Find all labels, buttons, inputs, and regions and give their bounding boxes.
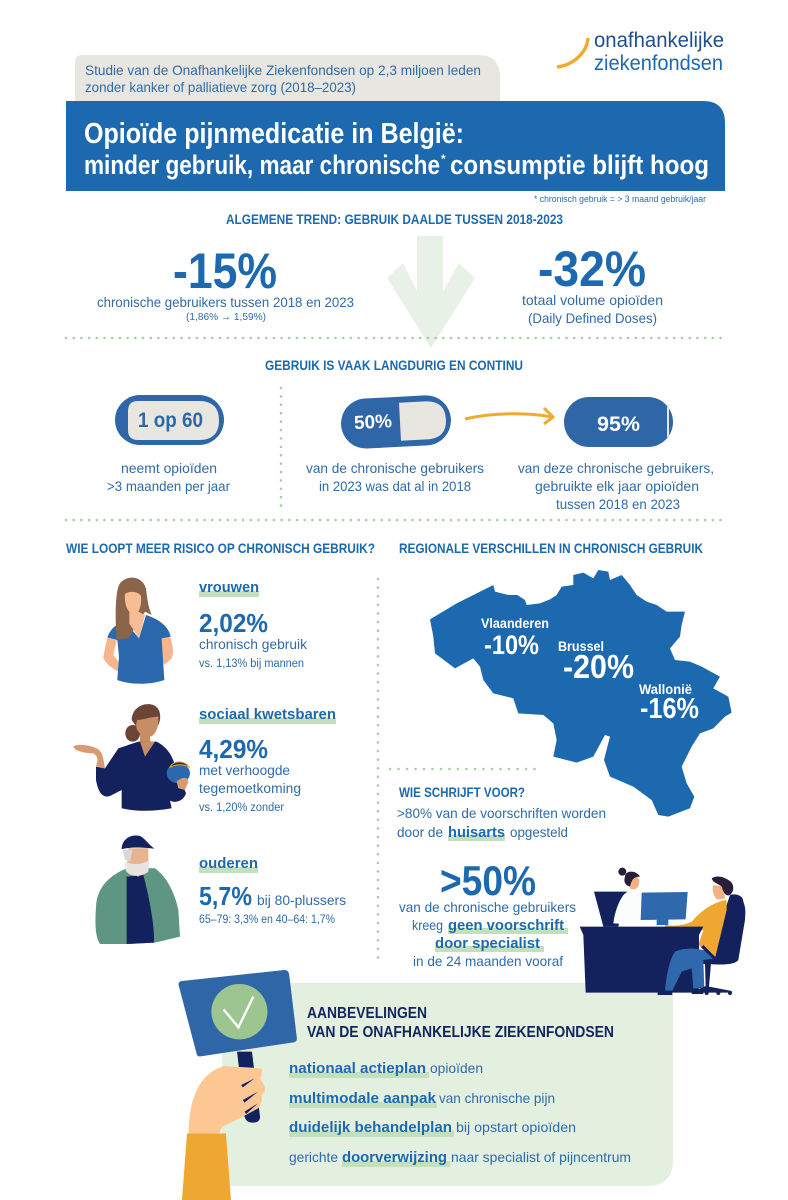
panel: recommendations: VAN DE ONAFHANKELIJKE ZIEKENFONDSEN (307, 1024, 614, 1041)
stat: over 50 percent: geen voorschrift (448, 917, 564, 934)
group: women: chronisch gebruik (199, 636, 308, 652)
group: socially vulnerable: tegemoetkoming (199, 780, 301, 796)
panel: recommendations: nationaal actieplan (289, 1060, 426, 1077)
group: women: 2,02% (199, 608, 268, 638)
icon: woman (103, 578, 173, 684)
map: Belgium: Brussel (558, 639, 604, 654)
heading: general trend: ALGEMENE TREND: GEBRUIK DAALDE TUSSEN 2018-2023 (226, 211, 563, 227)
stat: minus 15 percent (97, 243, 354, 323)
stat: over 50 percent: >50% (440, 857, 536, 904)
text: 50 percent: van de chronische gebruikers (306, 460, 484, 476)
group: women: vs. 1,13% bij mannen (199, 658, 304, 670)
heading: risk groups: WIE LOOPT MEER RISICO OP CHRONISCH GEBRUIK? (66, 540, 375, 556)
map: Belgium: -10% (484, 630, 539, 660)
arrow: pill to pill (465, 408, 553, 424)
study note tab: zonder kanker of palliatieve zorg (2018–2023) (85, 79, 356, 95)
panel: recommendations: naar specialist of pijncentrum (451, 1149, 631, 1165)
pill: 1 op 60: 1 op 60 (138, 409, 203, 432)
icon: doctor at desk with patient (580, 868, 745, 995)
panel: recommendations: van chronische pijn (439, 1090, 555, 1106)
panel: recommendations: gerichte (289, 1149, 338, 1165)
logo: onafhankelijke (594, 29, 724, 52)
text: 95 percent: tussen 2018 en 2023 (556, 496, 680, 512)
panel: recommendations: multimodale aanpak (289, 1090, 437, 1107)
text: 50 percent: in 2023 was dat al in 2018 (319, 478, 471, 494)
stat: minus 32 percent: totaal volume opioïden (522, 292, 663, 308)
logo: ziekenfondsen (594, 52, 723, 75)
pill: 95 percent (564, 397, 673, 447)
heading: regional differences: REGIONALE VERSCHILLEN IN CHRONISCH GEBRUIK (399, 540, 703, 556)
map: Belgium: Vlaanderen (481, 616, 549, 631)
stat: minus 15 percent: -15% (173, 243, 277, 299)
text: 1 in 60: neemt opioïden (121, 460, 217, 476)
stat: over 50 percent: in de 24 maanden vooraf (413, 953, 563, 969)
map: Belgium: -16% (640, 693, 699, 725)
stat: over 50 percent: van de chronische gebruikers (399, 899, 576, 915)
stat: over 50 percent (399, 857, 576, 969)
study note tab: Studie van de Onafhankelijke Ziekenfondsen op 2,3 miljoen leden (85, 62, 481, 78)
group: socially vulnerable (199, 706, 336, 814)
text: who prescribes: door de (397, 824, 443, 840)
logo (557, 29, 724, 75)
arrow: downward trend (387, 236, 475, 348)
text: 1 in 60: >3 maanden per jaar (107, 478, 230, 494)
text: who prescribes (397, 784, 606, 841)
group: elderly (199, 855, 346, 926)
stat: minus 15 percent: (1,86% → 1,59%) (186, 311, 266, 323)
study note tab (75, 55, 500, 101)
title banner: consumptie blijft hoog (450, 150, 709, 180)
stat: minus 32 percent: (Daily Defined Doses) (528, 310, 657, 326)
pill: 1 op 60 (115, 395, 224, 445)
stat: over 50 percent: door specialist (435, 935, 540, 952)
title banner (66, 101, 725, 191)
text: 50 percent (306, 460, 484, 494)
heading: long-term use: GEBRUIK IS VAAK LANGDURIG EN CONTINU (265, 357, 523, 373)
panel: recommendations: duidelijk behandelplan (289, 1119, 452, 1136)
stat: over 50 percent: kreeg (412, 917, 443, 933)
title banner: * (441, 152, 446, 166)
group: socially vulnerable: sociaal kwetsbaren (199, 706, 336, 723)
group: women (199, 579, 308, 670)
text: 95 percent (518, 460, 714, 512)
panel: recommendations: doorverwijzing (342, 1149, 447, 1166)
group: women: vrouwen (199, 579, 259, 596)
group: elderly: 65–79: 3,3% en 40–64: 1,7% (199, 914, 335, 926)
map: Belgium: -20% (563, 648, 634, 685)
stat: minus 32 percent: -32% (538, 241, 646, 297)
text: who prescribes: WIE SCHRIJFT VOOR? (399, 784, 525, 800)
stat: minus 32 percent (522, 241, 663, 326)
map: Belgium (430, 570, 732, 817)
group: elderly: bij 80-plussers (257, 892, 346, 908)
group: socially vulnerable: vs. 1,20% zonder (199, 802, 284, 814)
map: Belgium: Wallonië (639, 682, 692, 697)
text: who prescribes: huisarts (448, 824, 505, 841)
group: elderly: 5,7% (199, 881, 252, 911)
icon: woman with purse (73, 704, 190, 811)
title banner: Opioïde pijnmedicatie in België: (84, 118, 464, 150)
pill: 50 percent (340, 394, 452, 450)
group: elderly: ouderen (199, 855, 258, 872)
panel: recommendations: AANBEVELINGEN (307, 1005, 427, 1022)
text: who prescribes: opgesteld (510, 824, 568, 840)
panel: recommendations: opioïden (430, 1060, 483, 1076)
title banner: minder gebruik, maar chronische (84, 150, 440, 180)
text: 95 percent: van deze chronische gebruikers, (518, 460, 714, 476)
panel: recommendations (222, 983, 673, 1186)
footnote: * chronisch gebruik = > 3 maand gebruik/jaar (534, 194, 706, 205)
group: socially vulnerable: met verhoogde (199, 762, 290, 778)
pill: 50 percent: 50% (353, 411, 393, 434)
pill: 95 percent: 95% (597, 413, 640, 436)
text: 1 in 60 (107, 460, 230, 494)
stat: minus 15 percent: chronische gebruikers tussen 2018 en 2023 (97, 294, 354, 310)
icon: older man (95, 836, 180, 944)
panel: recommendations: bij opstart opioïden (456, 1119, 576, 1135)
icon: hand holding check sign (178, 970, 297, 1200)
text: who prescribes: >80% van de voorschriften worden (397, 805, 606, 821)
text: 95 percent: gebruikte elk jaar opioïden (535, 478, 699, 494)
group: socially vulnerable: 4,29% (199, 734, 268, 764)
